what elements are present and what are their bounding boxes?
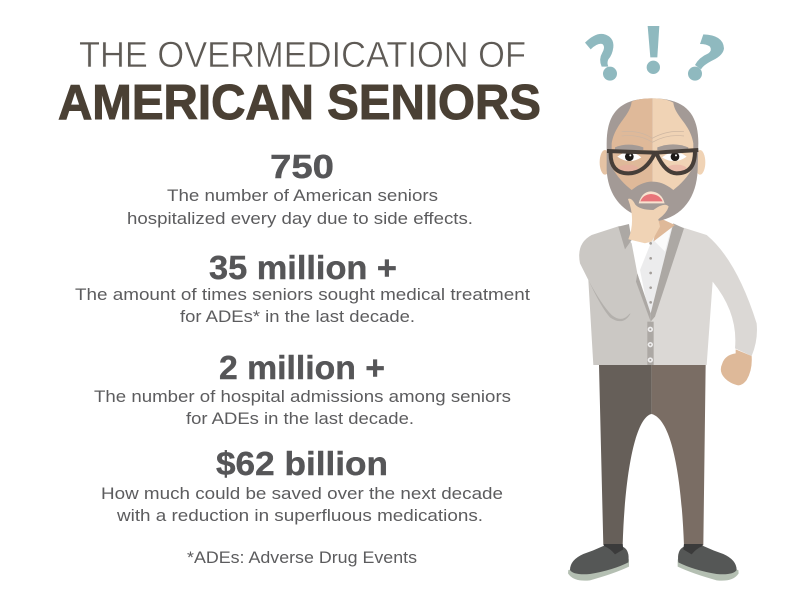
stat: 35 million +	[75, 249, 530, 326]
stat: 750	[127, 148, 473, 228]
stat: 2 million +: for ADEs in the last decade.	[186, 410, 414, 428]
stat: $62 billion: with a reduction in superfluous medications.	[116, 507, 483, 525]
stat: 35 million +: 35 million +	[209, 249, 397, 286]
mouth	[639, 191, 665, 203]
stat: 2 million +	[94, 349, 511, 428]
stat: $62 billion	[101, 445, 503, 525]
stat: 750: hospitalized every day due to side effects.	[127, 210, 473, 228]
glasses	[607, 150, 698, 173]
title: AMERICAN SENIORS	[58, 76, 541, 130]
question marks	[585, 26, 724, 81]
stat: 35 million +: The amount of times seniors sought medical treatment	[75, 286, 530, 304]
head	[600, 98, 705, 243]
stat: 2 million +: The number of hospital admissions among seniors	[94, 388, 511, 406]
illustration: confused senior man	[568, 26, 757, 581]
torso, arms and cardigan	[579, 223, 757, 385]
stat: $62 billion: $62 billion	[216, 445, 388, 482]
title: THE OVERMEDICATION OF	[79, 34, 526, 75]
stat: $62 billion: How much could be saved over the next decade	[101, 485, 503, 503]
stat: 35 million +: for ADEs* in the last decade.	[180, 308, 415, 326]
footnote: *ADEs: Adverse Drug Events	[187, 549, 417, 567]
stat: 750: The number of American seniors	[167, 187, 438, 205]
stat: 2 million +: 2 million +	[219, 349, 385, 386]
hand on chin	[628, 199, 669, 243]
stat: 750: 750	[270, 148, 334, 185]
title	[58, 34, 541, 130]
legs and shoes	[568, 365, 739, 581]
